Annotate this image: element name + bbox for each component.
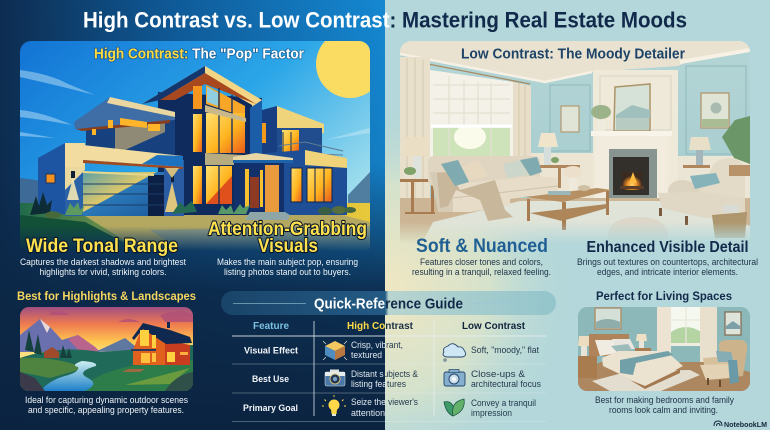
wainscot (531, 153, 597, 199)
row: best use: Best Use (252, 374, 289, 385)
table grid (232, 321, 546, 422)
block: soft and nuanced: Soft & Nuanced (416, 235, 548, 257)
block: soft and nuanced (412, 235, 551, 277)
icon: leaf (444, 399, 464, 416)
background: dark left half (0, 0, 385, 430)
table header: High Contrast (347, 320, 413, 332)
block: attention-grabbing visuals: listing photos stand out to buyers. (224, 267, 351, 277)
icon: textured cube (323, 341, 347, 360)
guide title bar: Quick-Reference Guide (314, 296, 463, 312)
ceiling (400, 41, 750, 82)
caption: landscape: and specific, appealing property features. (28, 405, 184, 415)
block: soft and nuanced: Features closer tones and colors, (420, 257, 543, 267)
heading: high contrast panel: High Contrast: The "Pop" Factor (94, 46, 304, 62)
sky (20, 41, 370, 203)
armchair (719, 340, 747, 378)
block: soft and nuanced: resulting in a tranquil, relaxed feeling. (412, 267, 551, 277)
curtains (400, 57, 430, 198)
ground (20, 203, 370, 248)
cushions (441, 160, 469, 186)
lamp left (406, 137, 424, 178)
foreground (20, 372, 45, 391)
window and curtains (671, 307, 701, 345)
side table left (400, 167, 435, 214)
caption: landscape (25, 395, 188, 415)
small table right, lamp, plant (683, 116, 750, 176)
row: visual effect: Crisp, vibrant, (351, 340, 403, 350)
block: enhanced visible detail (577, 239, 758, 277)
block: wide tonal range: Captures the darkest shadows and brightest (20, 257, 186, 267)
house (133, 325, 165, 365)
river (40, 361, 96, 391)
throw blanket (437, 172, 513, 221)
curtain rod (428, 64, 530, 84)
tall windows (193, 86, 202, 109)
table header: Low Contrast (462, 320, 525, 332)
window (430, 70, 513, 158)
row: primary goal: impression (471, 408, 512, 418)
foreground plants (30, 192, 356, 218)
panel: quick-reference guide (221, 291, 556, 422)
house: porch and door (233, 153, 293, 220)
block: wide tonal range (20, 235, 186, 277)
sofa (428, 156, 558, 221)
pictures (595, 308, 621, 329)
pouf and basket (609, 205, 747, 238)
row: best use (252, 369, 541, 389)
table header (253, 320, 525, 332)
panel: high contrast house illustration (20, 41, 370, 250)
row: visual effect: Soft, "moody," flat (471, 345, 539, 355)
row: primary goal: attention (351, 408, 385, 418)
row: primary goal: Primary Goal (243, 403, 298, 414)
small picture (561, 106, 579, 132)
background: light right half (385, 0, 770, 430)
side lamp centre (538, 133, 580, 188)
row: primary goal (243, 395, 536, 418)
row: visual effect: Visual Effect (244, 346, 299, 356)
wall (430, 135, 732, 198)
row: visual effect (244, 340, 539, 361)
panel: low contrast living room illustration (400, 41, 750, 256)
house: garage block (38, 143, 184, 216)
armchair (658, 158, 745, 225)
house: right wing (262, 106, 347, 215)
caption: bedroom (595, 395, 734, 415)
clouds (20, 70, 370, 140)
icon: soft cloud (443, 344, 466, 361)
block: attention-grabbing visuals: Attention-Grabbing (208, 218, 367, 240)
block: attention-grabbing visuals: Makes the main subject pop, ensuring (217, 257, 358, 267)
wall panels (550, 66, 746, 154)
icon: soft camera (444, 370, 465, 386)
block: enhanced visible detail: edges, and intricate interior elements. (597, 267, 738, 277)
row: best use: listing features (351, 379, 406, 389)
icon: light bulb (322, 395, 346, 416)
title: High Contrast vs. Low Contrast: Mastering Real Estate Moods (83, 8, 687, 32)
heading: low contrast panel: Low Contrast: The Moody Detailer (461, 46, 685, 62)
row: best use: Close-ups & (471, 369, 525, 379)
house: main tower (142, 66, 262, 215)
table header: Feature (253, 320, 289, 332)
lit meadow (20, 358, 85, 378)
picture right (701, 93, 729, 128)
bed (589, 334, 629, 356)
row: primary goal: Seize the viewer's (351, 397, 418, 407)
image: sunset landscape with house (20, 307, 193, 391)
mountains (20, 319, 100, 352)
row: best use: Distant subjects & (351, 369, 418, 379)
caption: bedroom: rooms look calm and inviting. (609, 405, 718, 415)
block: enhanced visible detail: Brings out textures on countertops, architectural (577, 257, 758, 267)
coffee table (525, 166, 612, 230)
row: primary goal: Convey a tranquil (471, 398, 536, 408)
caption: bedroom: Best for making bedrooms and family (595, 395, 734, 405)
floor (578, 362, 750, 391)
mantel (591, 131, 672, 136)
balcony (279, 142, 343, 155)
heading: best for highlights and landscapes: Best for Highlights & Landscapes (17, 291, 196, 303)
block: attention-grabbing visuals (208, 218, 367, 277)
icon: camera (325, 370, 345, 386)
notebooklm mark: NotebookLM (724, 420, 767, 429)
block: enhanced visible detail: Enhanced Visible Detail (586, 239, 748, 256)
icon: sun (316, 41, 370, 98)
heading: perfect for living spaces: Perfect for Living Spaces (596, 291, 732, 303)
row: best use: architectural focus (471, 379, 541, 389)
block: wide tonal range: Wide Tonal Range (26, 235, 178, 257)
chimney (593, 70, 678, 200)
block: wide tonal range: highlights for vivid, striking colors. (40, 267, 166, 277)
lamps and nightstands (578, 356, 597, 378)
house: left upper wing (74, 97, 175, 160)
mantel art (614, 84, 650, 131)
vase of greenery (591, 105, 611, 133)
caption: landscape: Ideal for capturing dynamic outdoor scenes (25, 395, 188, 405)
hills (20, 345, 193, 391)
guide title bar (221, 291, 556, 315)
image: bedroom (578, 307, 750, 391)
fireplace (609, 149, 657, 201)
row: visual effect: textured (351, 350, 382, 360)
distant hills (20, 178, 38, 203)
block: attention-grabbing visuals: Visuals (258, 235, 318, 257)
floor (400, 198, 750, 241)
